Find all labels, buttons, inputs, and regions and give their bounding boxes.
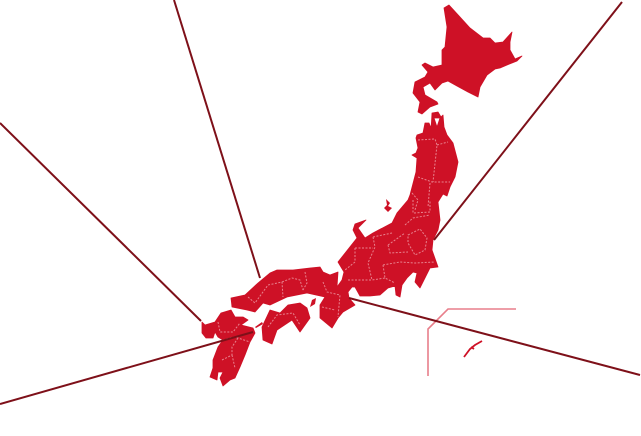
callout line: lower right bbox=[349, 298, 640, 375]
region: Hokkaido bbox=[413, 5, 522, 114]
callout line: lower left bbox=[0, 332, 253, 404]
callout line: upper right bbox=[434, 2, 622, 240]
region: Awaji island bbox=[310, 298, 316, 307]
map of Japan bbox=[202, 5, 522, 386]
region: Honshu bbox=[231, 112, 458, 328]
region: Okinawa bbox=[464, 341, 482, 357]
region: Sado island bbox=[384, 199, 392, 212]
callout line: upper left bbox=[0, 123, 201, 321]
prefecture borders bbox=[218, 139, 450, 368]
callout line: top bbox=[174, 0, 260, 278]
inset frame for Okinawa bbox=[428, 309, 516, 376]
region: small island link bbox=[255, 322, 263, 328]
region: Shikoku bbox=[262, 303, 310, 344]
region: Kyushu bbox=[202, 310, 255, 386]
